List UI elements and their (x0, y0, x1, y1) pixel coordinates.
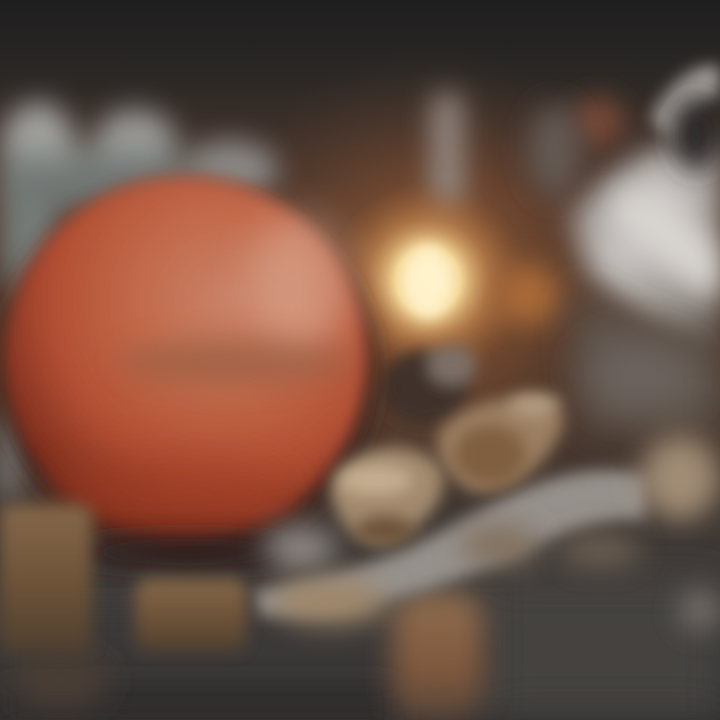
orange sphere (2, 176, 374, 552)
left cork (0, 505, 92, 653)
candle glow (328, 180, 528, 380)
white teapot (529, 66, 720, 430)
cloth strip and beige pieces (255, 393, 720, 630)
centre cork (135, 578, 247, 652)
grey cloth, top left (0, 102, 278, 503)
secondary amber glow (496, 265, 560, 325)
candle stem above glow (432, 92, 462, 212)
shadow under sphere (70, 538, 310, 566)
candle base (381, 345, 476, 426)
table surface (0, 580, 720, 720)
